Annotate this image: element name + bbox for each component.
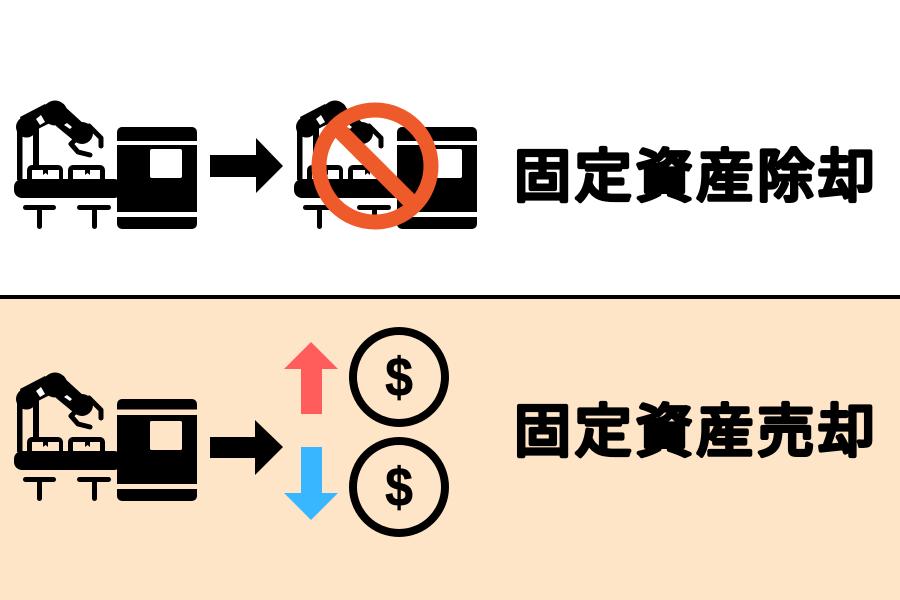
icon: coin lower	[353, 441, 445, 533]
icon: coin upper: $	[385, 348, 413, 409]
arrow: lower right	[210, 420, 283, 475]
title: fixed asset sale: 固定資産売却	[514, 400, 875, 464]
divider line	[0, 295, 900, 299]
icon: prohibited factory machine	[294, 100, 477, 229]
icon: coin lower: $	[385, 458, 413, 519]
icon: factory machine lower	[14, 372, 197, 501]
arrow: top right	[210, 138, 283, 193]
arrow: red up	[284, 342, 338, 414]
icon: factory machine	[14, 100, 197, 229]
icon: coin upper	[353, 331, 445, 423]
top panel background	[0, 0, 900, 296]
title: fixed asset retirement: 固定資産除却	[514, 145, 875, 209]
arrow: blue down	[284, 447, 338, 520]
bottom panel background	[0, 296, 900, 600]
